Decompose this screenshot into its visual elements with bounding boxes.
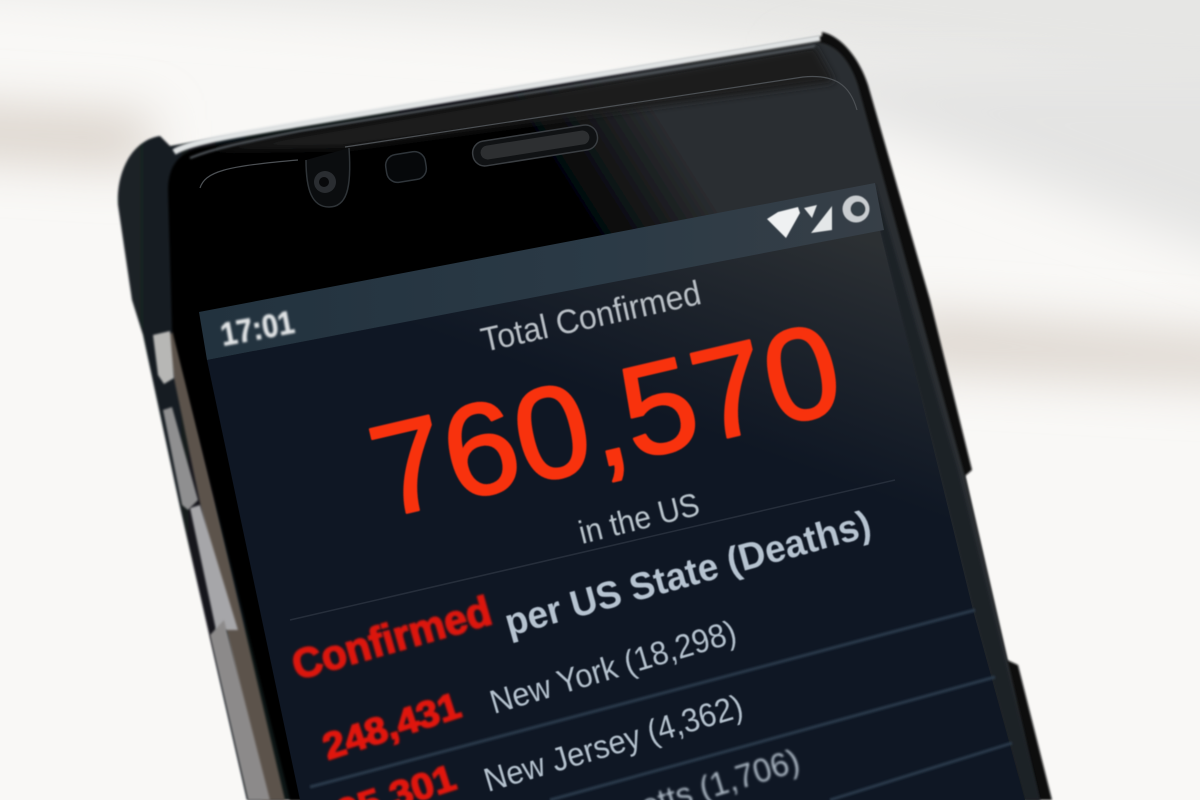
row: New York: New York (18,298) bbox=[485, 613, 740, 721]
phone case body bbox=[118, 32, 1052, 800]
heading: Confirmed bbox=[287, 587, 497, 689]
glass notch outline bbox=[200, 77, 857, 188]
status icon: signal bbox=[804, 205, 832, 233]
clock: 17:01 bbox=[218, 304, 297, 353]
side rail: power button bbox=[210, 620, 270, 800]
heading bbox=[287, 503, 876, 689]
side rail base bbox=[165, 332, 285, 800]
earpiece speaker bbox=[471, 123, 599, 168]
status icon: wifi bbox=[767, 207, 800, 238]
side rail: upper silver bbox=[153, 331, 174, 384]
big number: 760,570 bbox=[357, 294, 854, 545]
status icon: battery ring bbox=[842, 196, 870, 222]
label: in the US: in the US bbox=[575, 486, 703, 551]
label: total confirmed: Total Confirmed bbox=[478, 274, 704, 360]
heading divider bbox=[290, 480, 895, 620]
row: New York: 248,431 bbox=[318, 685, 466, 768]
proximity sensor bbox=[384, 150, 428, 184]
status bar bbox=[199, 183, 884, 360]
row: New Jersey: New Jersey (4,362) bbox=[479, 687, 747, 799]
row: New York bbox=[318, 613, 740, 768]
heading: per US State (Deaths) bbox=[500, 503, 876, 645]
side rail: volume button bbox=[163, 407, 198, 510]
right bezel bbox=[875, 183, 1040, 800]
screen area bbox=[207, 230, 1025, 800]
glass edge shadow bbox=[190, 46, 815, 158]
glass top highlight bbox=[174, 38, 820, 152]
phone bbox=[118, 32, 1052, 800]
top bezel sheen bbox=[205, 46, 835, 150]
screen reflection bbox=[542, 230, 931, 440]
side rail: middle silver bbox=[190, 505, 238, 630]
screen glass bbox=[168, 42, 1040, 800]
row dividers bbox=[310, 610, 1012, 800]
row: New Jersey bbox=[332, 687, 747, 800]
front camera bbox=[306, 148, 350, 207]
